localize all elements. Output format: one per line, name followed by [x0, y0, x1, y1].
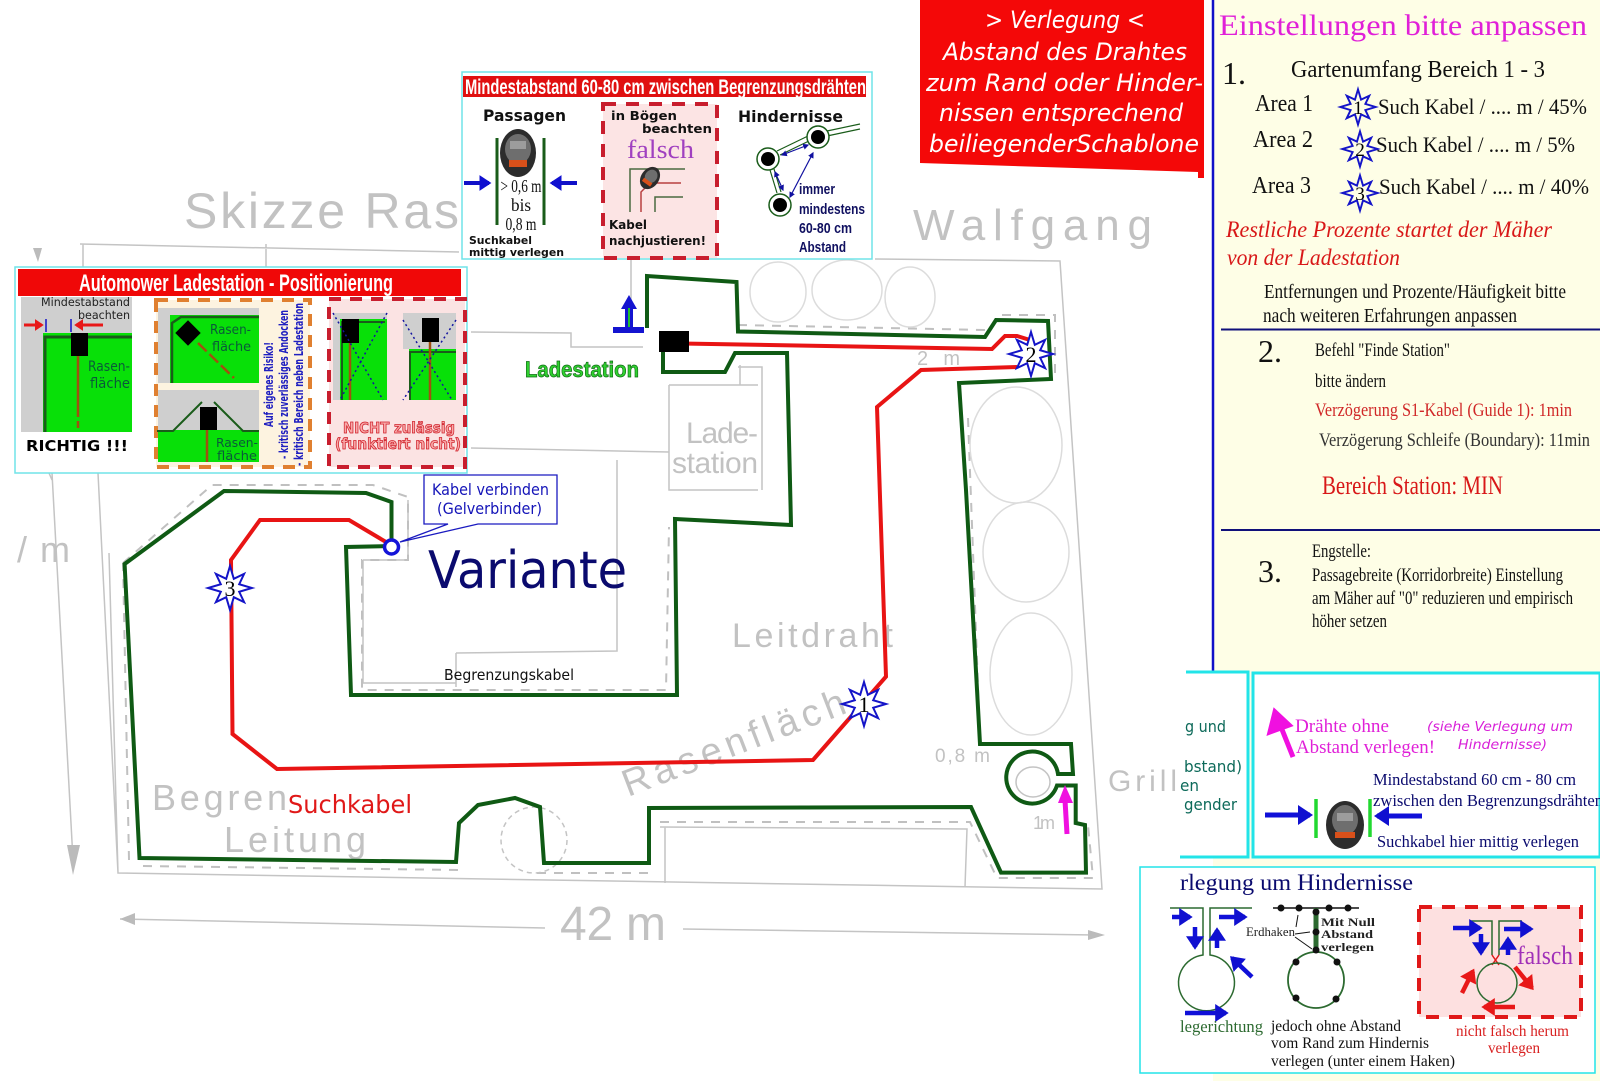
- background hand sketch: 1 m: [1033, 813, 1055, 833]
- diagram: correct: beachten: [78, 308, 130, 322]
- callout: cable connector: (Gelverbinder): [437, 499, 542, 518]
- background hand sketch: Begren: [152, 777, 287, 818]
- diagram: hooks without gap: Abstand: [1321, 927, 1373, 941]
- section 1: Such Kabel / .... m / 40%: [1379, 174, 1589, 199]
- background hand sketch: 0,8 m: [935, 746, 990, 767]
- label: Suchkabel: Suchkabel: [288, 790, 412, 819]
- panel: laying text fragment: en: [1180, 776, 1199, 795]
- diagram: hooks without gap: [1246, 904, 1455, 1070]
- panel: red laying note: nissen entsprechend: [939, 99, 1184, 127]
- section 1: 1.: [1222, 55, 1246, 91]
- diagram: wrong direction: [1419, 907, 1581, 1057]
- background hand sketch: 42 m: [560, 898, 666, 951]
- diagram: hooks without gap: verlegen: [1321, 940, 1374, 954]
- section 1: [1222, 55, 1589, 199]
- diagram: own risk: - kritisch zuverlässiges Andocken: [277, 310, 291, 459]
- panel: laying text fragment: g und: [1185, 717, 1226, 736]
- column: Passagen: Passagen: [483, 106, 566, 125]
- panel: red laying note: [920, 0, 1204, 178]
- label: Ladestation: Ladestation: [525, 357, 639, 382]
- diagram: hooks without gap: verlegen (unter einem Haken): [1271, 1053, 1455, 1070]
- section 3: höher setzen: [1312, 611, 1387, 632]
- background hand sketch: Rasenfläch: [616, 682, 852, 805]
- panel: red laying note: zum Rand oder Hinder-: [925, 69, 1203, 97]
- icon: star 3: [1342, 175, 1378, 211]
- diagram: wrong direction: nicht falsch herum: [1456, 1023, 1570, 1040]
- column: in Bögen: nachjustieren!: [609, 234, 706, 248]
- diagram: hooks without gap: vom Rand zum Hindernis: [1271, 1035, 1429, 1052]
- arrow: magenta: [1270, 712, 1293, 757]
- background hand sketch: 2 m: [917, 348, 960, 370]
- icon: star 1: 1: [1353, 98, 1363, 119]
- charging station block: [659, 331, 689, 352]
- diagram: own risk: Rasen-: [210, 322, 251, 338]
- note: wires without distance: [1295, 716, 1435, 758]
- background hand sketch: / m: [17, 529, 70, 570]
- diagram: correct: [21, 295, 132, 455]
- note: see obstacles: [1427, 719, 1573, 753]
- section 2: Bereich Station: MIN: [1322, 471, 1503, 500]
- icon: star 2: 2: [1355, 140, 1365, 161]
- section 3: [1258, 541, 1573, 632]
- background hand sketch: Lade-: [686, 417, 758, 450]
- diagram: not allowed: (funktiert nicht): [335, 435, 461, 453]
- note: remaining percent: Restliche Prozente startet der Mäher: [1225, 217, 1553, 242]
- section 1: Area 1: [1255, 91, 1313, 117]
- star 2: 2: [1026, 342, 1036, 367]
- icon: passage arrows: [1265, 815, 1422, 816]
- note: minimum distance: Mindestabstand 60 cm - 80 cm: [1373, 770, 1576, 789]
- star 3: 3: [224, 576, 236, 601]
- diagram: own risk: - kritisch Bereich neben Ladestation: [292, 303, 306, 466]
- callout: cable connector: [400, 475, 557, 542]
- section 3: Engstelle:: [1312, 541, 1371, 562]
- heading: settings: Einstellungen bitte anpassen: [1219, 9, 1587, 42]
- column: Passagen: 0,8 m: [506, 214, 536, 234]
- note: minimum distance: [1373, 770, 1600, 851]
- column: in Bögen: falsch: [627, 135, 694, 164]
- diagram: not allowed: [329, 299, 465, 467]
- diagram: hooks without gap: Mit Null: [1321, 915, 1376, 929]
- background hand sketch: Leitdraht: [732, 617, 894, 655]
- section 1: Gartenumfang Bereich 1 - 3: [1291, 57, 1545, 83]
- column: Hindernisse: Abstand: [799, 239, 846, 256]
- column: in Bögen: beachten: [642, 122, 712, 136]
- panel: laying text fragment: [1180, 672, 1249, 857]
- icon: north arrow: [613, 295, 644, 333]
- column: Passagen: bis: [511, 195, 531, 215]
- panel: laying text fragment: gender: [1184, 795, 1237, 814]
- note: remaining percent: [1225, 217, 1553, 270]
- column: Hindernisse: 60-80 cm: [799, 220, 852, 237]
- heading: obstacles: rlegung um Hindernisse: [1180, 870, 1413, 895]
- panel: red laying note: Abstand des Drahtes: [941, 38, 1187, 66]
- note: see obstacles: Hindernisse): [1458, 737, 1547, 753]
- background hand sketch: Grill: [1108, 765, 1177, 798]
- section 1: Area 2: [1253, 127, 1313, 153]
- panel: laying text fragment: bstand): [1184, 757, 1242, 776]
- callout: cable connector: Kabel verbinden: [432, 480, 549, 499]
- panel: settings: [1213, 0, 1600, 1081]
- diagram: not allowed: NICHT zulässig: [343, 419, 455, 437]
- column: Hindernisse: Hindernisse: [738, 107, 843, 126]
- diagram: laying direction: legerichtung: [1180, 1017, 1263, 1036]
- heading bar: Automower Ladestation - Positionierung: [79, 270, 393, 297]
- background hand sketch: Walfgang: [913, 201, 1152, 250]
- arrow: grill passage: [1065, 800, 1067, 834]
- column: Passagen: Suchkabel: [469, 235, 532, 247]
- column: Hindernisse: [738, 107, 865, 256]
- note: see obstacles: (siehe Verlegung um: [1427, 719, 1573, 735]
- column: Hindernisse: immer: [799, 181, 835, 198]
- diagram: correct: fläche: [90, 376, 130, 392]
- icon: star 1: [1340, 89, 1376, 125]
- background hand sketch: Leitung: [224, 819, 366, 860]
- star 1: [842, 682, 886, 726]
- star 1: 1: [858, 692, 870, 717]
- section 2: bitte ändern: [1315, 371, 1386, 392]
- icon: star 2: [1342, 131, 1378, 167]
- diagram: own risk: fläche: [212, 339, 251, 355]
- diagram: hooks without gap: Erdhaken: [1246, 924, 1295, 939]
- panel: minimum distance top: [462, 72, 872, 259]
- arrow head: grill passage: [1058, 785, 1073, 803]
- note: distances: [1263, 281, 1566, 327]
- icon: mower: [1326, 801, 1364, 849]
- diagram: own risk: Rasen-: [216, 436, 258, 450]
- diagram: own risk: fläche: [217, 449, 257, 463]
- panel: passage distance: [1253, 673, 1600, 857]
- section 2: Befehl "Finde Station": [1315, 340, 1450, 361]
- diagram: laying direction: [1170, 908, 1263, 1036]
- column: Hindernisse: mindestens: [799, 201, 865, 218]
- diagram: own risk: [156, 300, 310, 467]
- boundary wire (green): [125, 276, 1086, 873]
- note: distances: nach weiteren Erfahrungen anpassen: [1263, 305, 1517, 327]
- diagram: correct: Mindestabstand: [41, 295, 130, 309]
- star 3: [208, 566, 252, 610]
- panel: red laying note: > Verlegung <: [985, 6, 1145, 34]
- marker: connector ring: [384, 540, 398, 554]
- column: Passagen: mittig verlegen: [469, 247, 564, 259]
- diagram: hooks without gap: jedoch ohne Abstand: [1270, 1018, 1401, 1035]
- diagram: correct: RICHTIG !!!: [26, 437, 128, 455]
- background hand sketch: station: [672, 447, 758, 480]
- column: Passagen: [464, 106, 577, 259]
- diagram: correct: Rasen-: [88, 359, 130, 375]
- icon: star 3: 3: [1355, 184, 1365, 205]
- note: remaining percent: von der Ladestation: [1227, 245, 1400, 270]
- guide wire (red): [231, 336, 1030, 769]
- background hand sketch: Skizze Ras: [184, 183, 459, 239]
- note: wires without distance: Drähte ohne: [1295, 716, 1389, 737]
- section 2: [1258, 333, 1590, 500]
- heading bar: Mindestabstand 60-80 cm zwischen Begrenzungsdrähten: [465, 76, 866, 99]
- panel: charging station positioning: [15, 267, 467, 473]
- note: minimum distance: Suchkabel hier mittig verlegen: [1377, 832, 1579, 851]
- section 1: Such Kabel / .... m / 5%: [1376, 132, 1575, 157]
- section 3: 3.: [1258, 553, 1282, 589]
- panel: laying around obstacles: [1140, 867, 1595, 1073]
- star 2: [1009, 332, 1053, 376]
- section 1: Area 3: [1252, 173, 1311, 199]
- note: wires without distance: Abstand verlegen!: [1296, 737, 1435, 758]
- column: in Bögen: in Bögen: [611, 109, 677, 123]
- column: in Bögen: Kabel: [609, 218, 647, 232]
- column: in Bögen: [603, 104, 717, 258]
- column: Passagen: > 0,6 m: [500, 176, 542, 196]
- section 1: Such Kabel / .... m / 45%: [1378, 94, 1587, 119]
- diagram: own risk: Auf eigenes Risiko!: [262, 342, 276, 427]
- label: Variante: Variante: [428, 541, 627, 601]
- diagram: wrong direction: verlegen: [1488, 1040, 1540, 1057]
- label: Begrenzungskabel: Begrenzungskabel: [444, 666, 574, 684]
- diagram: wrong direction: falsch: [1517, 941, 1573, 970]
- section 2: 2.: [1258, 333, 1282, 369]
- panel: red laying note: beiliegenderSchablone: [929, 130, 1199, 158]
- background hand sketch: [17, 183, 1177, 951]
